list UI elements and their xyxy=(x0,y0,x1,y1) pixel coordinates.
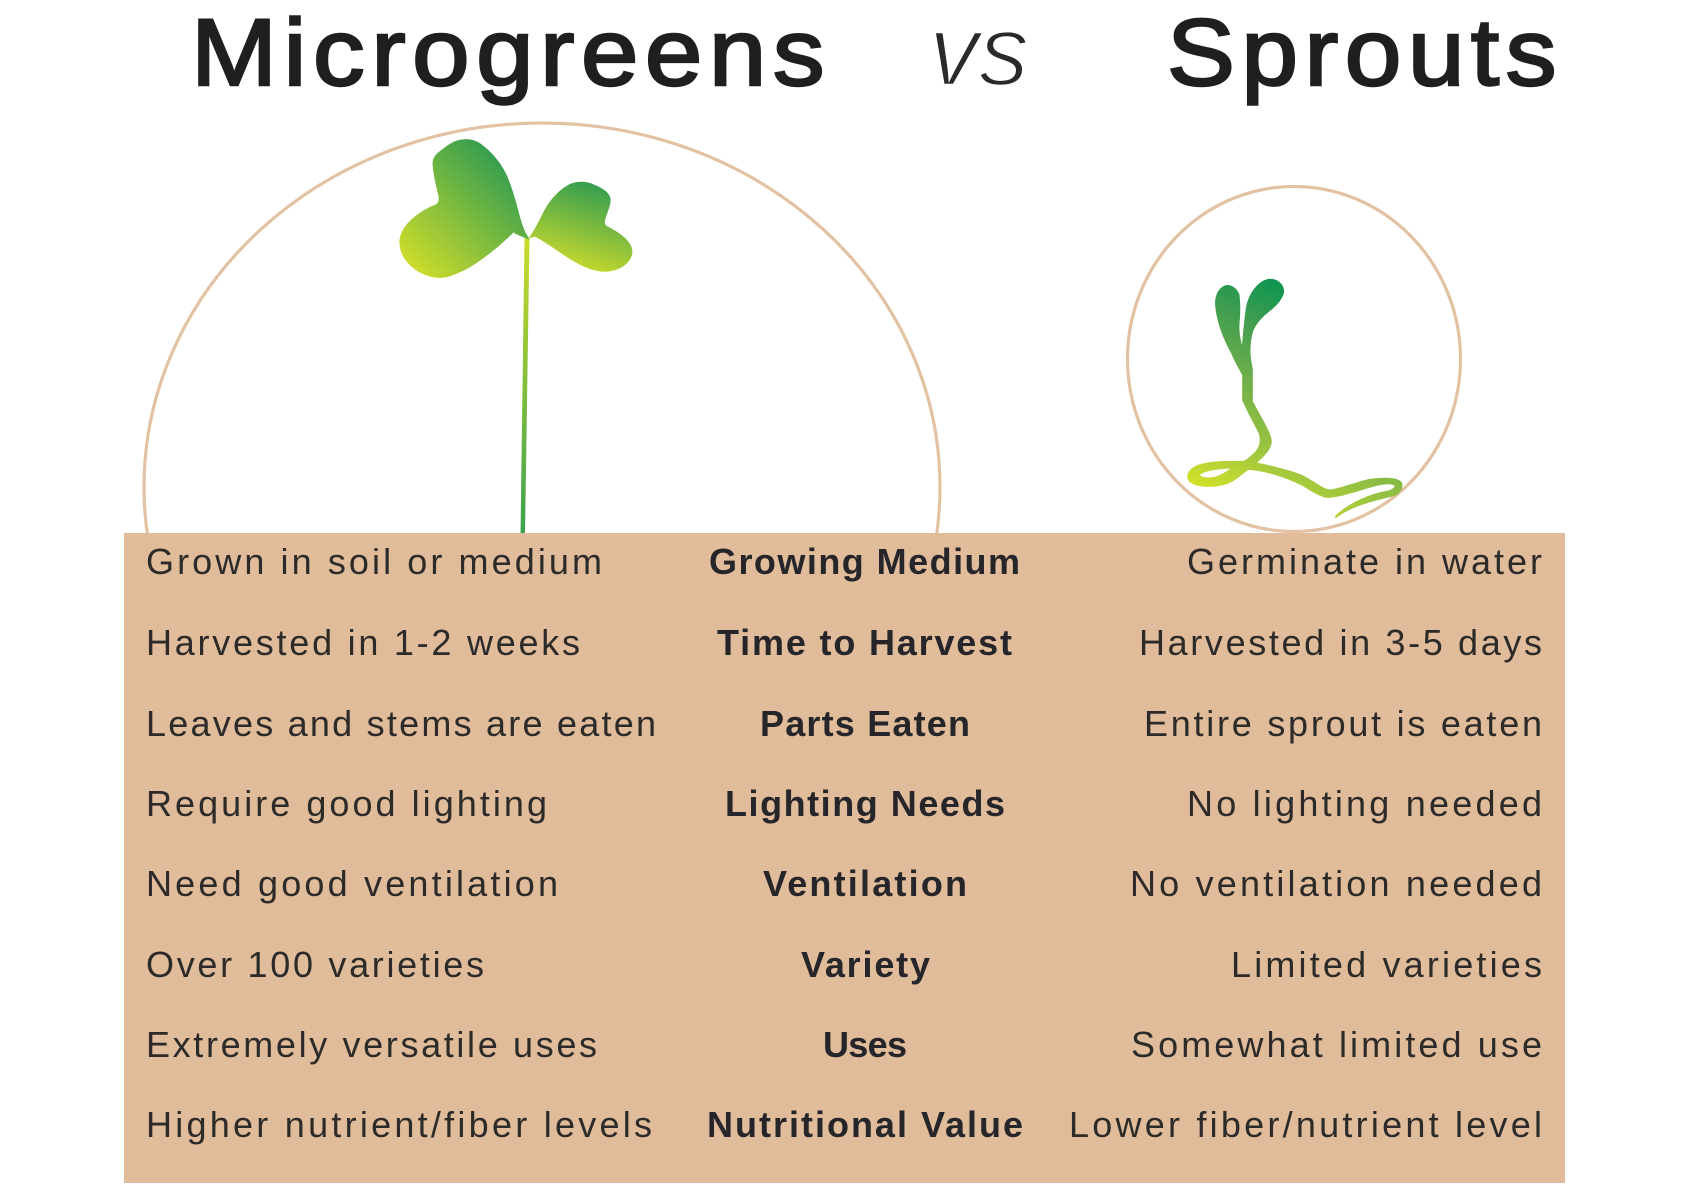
row: Time to Harvest xyxy=(146,622,1542,663)
sprout illustration in circle xyxy=(1128,186,1460,532)
row: Variety xyxy=(146,944,1542,985)
row: Lighting Needs: Require good lighting xyxy=(146,783,547,824)
row: Uses: Uses xyxy=(823,1024,907,1065)
row: Uses: Extremely versatile uses xyxy=(146,1024,597,1065)
row: Growing Medium xyxy=(146,541,1542,582)
row: Time to Harvest: Time to Harvest xyxy=(717,622,1012,663)
title: Microgreens vs Sprouts xyxy=(191,0,1563,107)
row: Nutritional Value: Lower fiber/nutrient level xyxy=(1069,1104,1542,1145)
row: Variety: Variety xyxy=(801,944,930,985)
row: Nutritional Value: Nutritional Value xyxy=(707,1104,1023,1145)
row: Growing Medium: Grown in soil or medium xyxy=(146,541,602,582)
circle outline xyxy=(1128,186,1460,532)
row: Parts Eaten: Parts Eaten xyxy=(760,703,970,744)
row: Nutritional Value: Higher nutrient/fiber levels xyxy=(146,1104,652,1145)
heading: Microgreens: Microgreens xyxy=(191,0,831,106)
icon: sprout xyxy=(1188,280,1401,517)
row: Nutritional Value xyxy=(146,1104,1542,1145)
row: Parts Eaten xyxy=(146,703,1542,744)
row: Time to Harvest: Harvested in 1-2 weeks xyxy=(146,622,580,663)
microgreen illustration in arch xyxy=(144,123,940,851)
row: Lighting Needs xyxy=(146,783,1542,824)
row: Lighting Needs: Lighting Needs xyxy=(725,783,1005,824)
row: Ventilation: No ventilation needed xyxy=(1130,863,1542,904)
row: Growing Medium: Germinate in water xyxy=(1187,541,1542,582)
icon: microgreen leaves xyxy=(400,140,632,277)
row: Variety: Limited varieties xyxy=(1231,944,1542,985)
row: Uses xyxy=(146,1024,1542,1065)
row: Growing Medium: Growing Medium xyxy=(709,541,1020,582)
row: Ventilation: Need good ventilation xyxy=(146,863,558,904)
row: Variety: Over 100 varieties xyxy=(146,944,484,985)
row: Ventilation: Ventilation xyxy=(763,863,967,904)
heading: Sprouts: Sprouts xyxy=(1167,0,1563,106)
row: Uses: Somewhat limited use xyxy=(1131,1024,1542,1065)
arch outline xyxy=(144,123,940,851)
icon: microgreen stem xyxy=(520,238,530,535)
row: Ventilation xyxy=(146,863,1542,904)
panel: comparison table xyxy=(124,533,1565,1183)
row: Parts Eaten: Entire sprout is eaten xyxy=(1144,703,1542,744)
row: Lighting Needs: No lighting needed xyxy=(1187,783,1542,824)
row: Time to Harvest: Harvested in 3-5 days xyxy=(1139,622,1542,663)
panel background xyxy=(124,533,1565,1183)
row: Parts Eaten: Leaves and stems are eaten xyxy=(146,703,656,744)
